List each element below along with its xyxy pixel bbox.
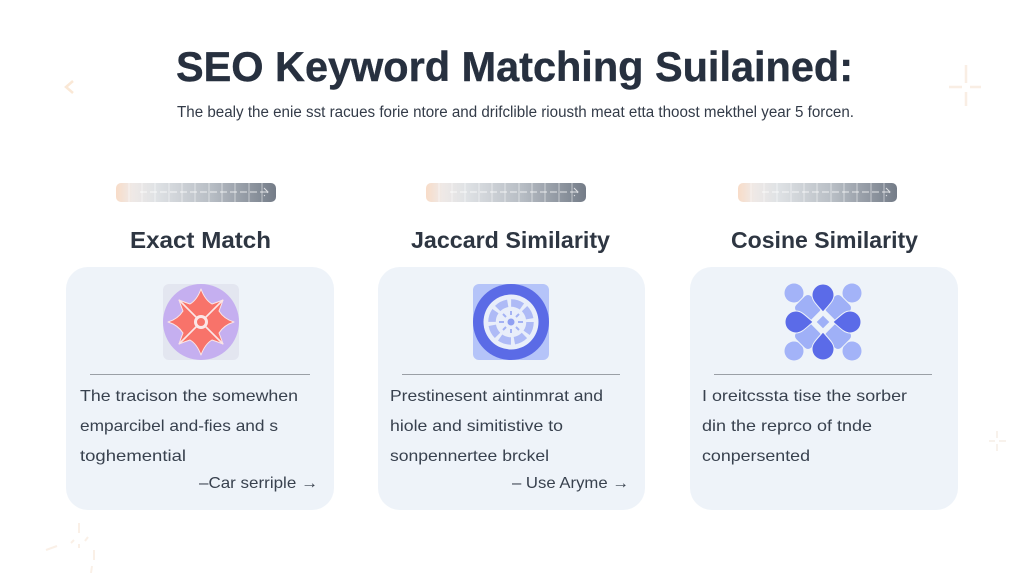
icon: wheel [473, 284, 549, 360]
card [690, 267, 958, 510]
body text [702, 388, 908, 465]
body text: Prestinesent aintinmrat and [390, 388, 603, 405]
subtitle: The bealy the enie sst racues forie ntore and drifclible riousth meat etta thoost mekthel year 5 forcen. [177, 104, 854, 121]
link: –Car serriple → [199, 475, 318, 492]
body text: The tracison the somewhen [80, 388, 298, 405]
panel: Cosine Similarity [690, 183, 958, 510]
heading: Cosine Similarity [731, 227, 918, 253]
divider [90, 374, 310, 375]
icon: coral star [163, 284, 239, 360]
divider [402, 374, 620, 375]
body text: conpersented [702, 448, 810, 465]
body text: sonpennertee brckel [390, 448, 549, 465]
decoration: sparkle bottom left [46, 523, 94, 573]
body text [80, 388, 298, 465]
progress strip [426, 183, 586, 202]
body text: hiole and simitistive to [390, 418, 563, 435]
decoration: cross right [989, 431, 1006, 451]
body text: toghemential [80, 448, 186, 465]
card [378, 267, 645, 510]
decoration: cross top right [949, 65, 981, 106]
divider [714, 374, 932, 375]
card [66, 267, 334, 510]
panel: Jaccard Similarity [378, 183, 645, 510]
body text: emparcibel and-fies and s [80, 418, 278, 435]
heading: Jaccard Similarity [411, 227, 610, 253]
progress strip [116, 183, 276, 202]
panel: Exact Match [66, 183, 334, 510]
link: – Use Aryme → [512, 475, 629, 492]
body text: din the reprco of tnde [702, 418, 872, 435]
icon: petal flower [784, 284, 862, 360]
body text [390, 388, 603, 465]
heading: Exact Match [130, 227, 271, 253]
body text: I oreitcssta tise the sorber [702, 388, 908, 405]
decoration: chevron top left [66, 81, 73, 93]
progress strip [738, 183, 897, 202]
title: SEO Keyword Matching Suilained: [176, 43, 853, 90]
